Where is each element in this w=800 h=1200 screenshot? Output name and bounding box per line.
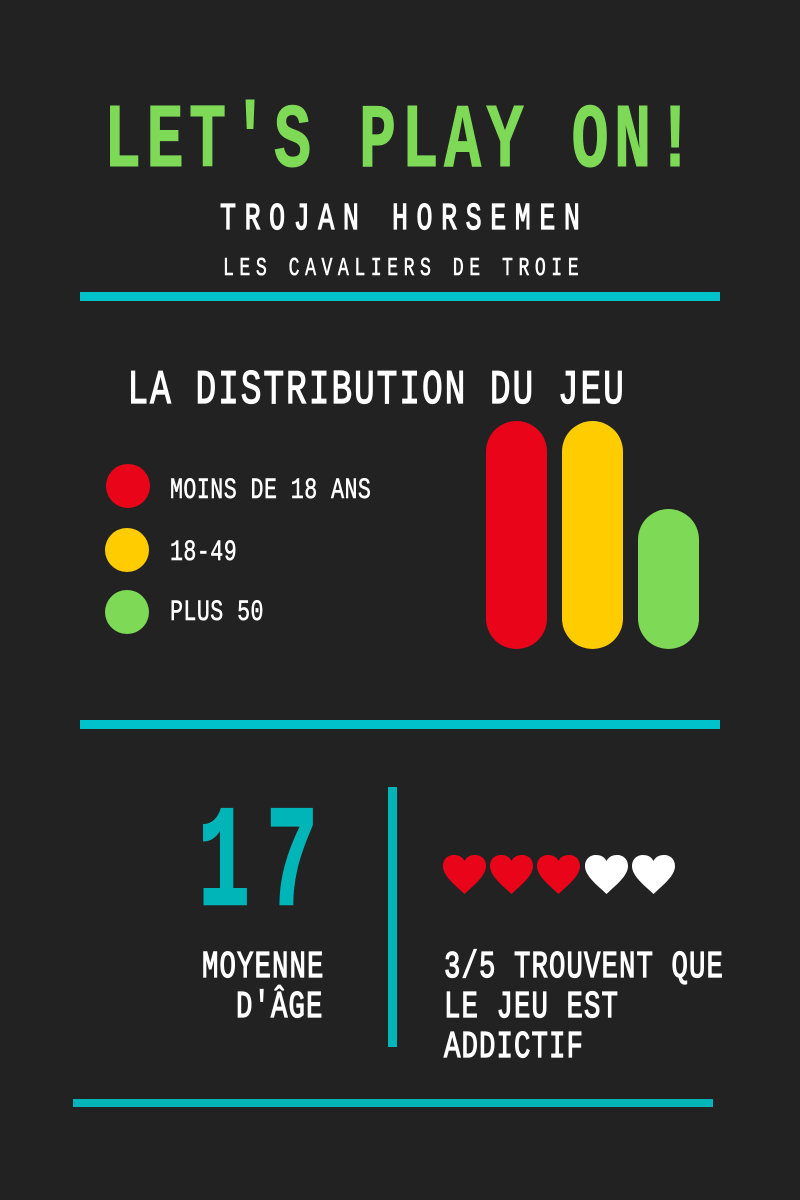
text: addiction line 1: 3/5 TROUVENT QUE [444, 945, 724, 988]
icon: red heart [490, 855, 533, 894]
legend item: over 50 [105, 590, 264, 634]
label: average age: MOYENNE [202, 945, 324, 988]
subtitle: Les cavaliers de Troie: LES CAVALIERS DE TROIE [223, 253, 584, 283]
text: addiction line 3: ADDICTIF [444, 1025, 584, 1068]
bar: 18-49 [562, 421, 623, 649]
divider: middle [80, 720, 720, 729]
header: title and subtitles [104, 91, 699, 283]
legend item: 18-49 [105, 528, 237, 572]
bar: under 18 [486, 421, 547, 649]
heading: distribution: LA DISTRIBUTION DU JEU [128, 363, 626, 418]
subtitle: Trojan Horsemen: TROJAN HORSEMEN [220, 198, 588, 241]
big number 17: 17 [198, 784, 334, 948]
bar chart [486, 421, 699, 649]
icon: white heart [585, 855, 628, 894]
panel: game distribution [105, 363, 699, 649]
label: average age line 2: D'ÂGE [236, 985, 324, 1028]
bar: over 50 [638, 509, 699, 649]
divider: bottom [73, 1099, 713, 1107]
title: LET'S PLAY ON! [104, 91, 699, 194]
legend item: 18-49: 18-49 [170, 535, 237, 569]
panel: addiction [443, 855, 724, 1068]
vertical divider [388, 787, 397, 1047]
icon: red heart [443, 855, 486, 894]
divider: top [80, 292, 720, 301]
legend item: under 18 [106, 464, 371, 508]
legend item: over 50: PLUS 50 [170, 595, 264, 629]
text: addiction line 2: LE JEU EST [444, 985, 619, 1028]
legend [105, 464, 371, 634]
icon: red heart [537, 855, 580, 894]
legend item: under 18: MOINS DE 18 ANS [170, 473, 371, 507]
icon: white heart [632, 855, 675, 894]
hearts rating [443, 855, 675, 894]
panel: average age [198, 784, 334, 1028]
